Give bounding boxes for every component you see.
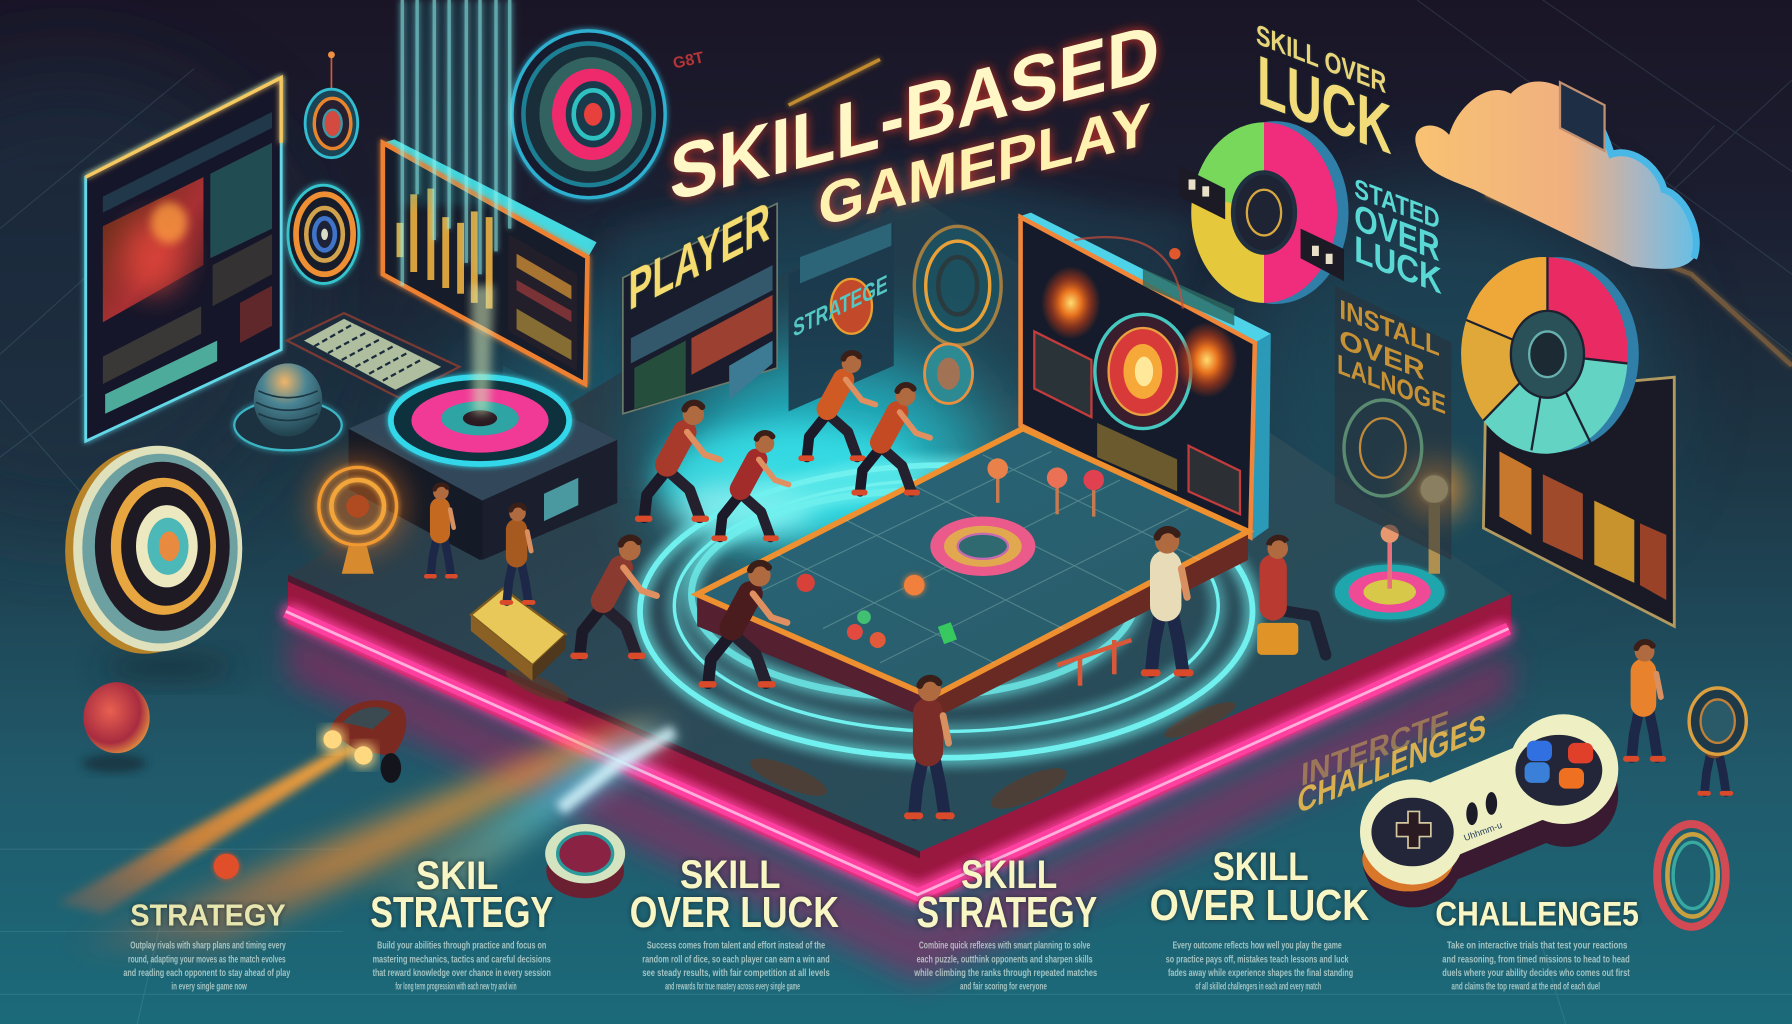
- players: [426, 353, 1663, 816]
- cyan floor glow: [657, 354, 989, 560]
- column: skill strategy: [370, 854, 553, 993]
- column: skill strategy two: while climbing the ranks through repeated matches: [914, 968, 1097, 979]
- central screen: [1017, 213, 1271, 539]
- orange install over lalnoge panel: LALNOGE: [1337, 348, 1446, 421]
- column: skill strategy two: STRATEGY: [917, 889, 1097, 937]
- column: strategy: in every single game now: [171, 982, 247, 993]
- left wall screen: [86, 78, 281, 441]
- small hanging target: [305, 51, 358, 158]
- ring puck: [545, 824, 625, 898]
- player 7 white shirt: [1144, 529, 1190, 673]
- segmented wheel two: [1461, 257, 1639, 454]
- decorative flare arc: [1074, 237, 1183, 309]
- column: skill over luck: and rewards for true mastery across every single game: [665, 982, 800, 993]
- medium target: [288, 185, 359, 283]
- strategy word: STRATEGE: [793, 269, 888, 342]
- bottom right ring: [1657, 824, 1726, 927]
- column: skill over luck two: fades away while experience shapes the final standing: [1168, 968, 1353, 979]
- title: GAMEPLAY: [818, 91, 1151, 239]
- column: skill strategy two: and fair scoring for everyone: [960, 982, 1047, 993]
- strategy panel: [789, 223, 894, 411]
- column: challenges: CHALLENGE5: [1435, 896, 1639, 934]
- column: challenges: duels where your ability decides who comes out first: [1442, 968, 1630, 979]
- column: skill strategy: for long term progression with each new try and win: [395, 982, 517, 993]
- column: skill over luck: random roll of dice, so each player can earn a win and: [642, 954, 830, 965]
- sphere on ring: [234, 363, 342, 450]
- column: skill over luck two: of all skilled challengers in each and every match: [1195, 982, 1321, 993]
- column: skill strategy two: [914, 853, 1097, 993]
- keyboard: [287, 313, 459, 398]
- speed streaks: [57, 720, 674, 949]
- game controller: [1360, 714, 1618, 907]
- skill over luck heading: SKILL OVER: [1256, 18, 1386, 100]
- column: skill strategy: that reward knowledge over chance in every session: [373, 968, 551, 979]
- gold crate: [471, 589, 566, 681]
- red ball: [82, 682, 150, 773]
- column: challenges: and reasoning, from timed missions to head to head: [1442, 954, 1630, 965]
- column: challenges: [1435, 896, 1639, 993]
- column: skill strategy: Build your abilities through practice and focus on: [377, 941, 546, 952]
- column: skill over luck two: SKILL: [1213, 845, 1309, 889]
- monitor: [383, 139, 597, 423]
- column: strategy: and reading each opponent to stay ahead of play: [123, 968, 290, 979]
- column: skill over luck: see steady results, with fair competition at all levels: [642, 968, 830, 979]
- game table: [697, 429, 1248, 720]
- neon rings: [640, 465, 1253, 758]
- player 1: [638, 403, 720, 519]
- cyan stated over luck: LUCK: [1354, 227, 1442, 303]
- column: challenges: and claims the top reward at the end of each duel: [1451, 982, 1600, 993]
- interactive challenges sign: CHALLENGES: [1297, 707, 1487, 822]
- column: skill strategy: STRATEGY: [370, 889, 553, 937]
- title: SKILL-BASED: [669, 8, 1159, 218]
- small red tag with flare: [672, 49, 880, 105]
- column: skill over luck: OVER LUCK: [630, 889, 839, 937]
- pedestal target: [349, 286, 617, 560]
- player 8 seated: [1257, 537, 1326, 655]
- player 9 front: [907, 678, 951, 816]
- column: skill strategy: mastering mechanics, tactics and careful decisions: [373, 954, 551, 965]
- column: skill over luck: [630, 853, 839, 993]
- right panel: [1483, 377, 1674, 626]
- neon vertical line: [1294, 343, 1296, 526]
- light beam: [400, 0, 514, 286]
- player 6: [702, 563, 787, 684]
- column: strategy: Outplay rivals with sharp plans and timing every: [130, 941, 286, 952]
- glowing lamp: [1405, 459, 1464, 574]
- column: skill strategy two: SKILL: [961, 853, 1057, 897]
- column: challenges: Take on interactive trials that test your reactions: [1447, 941, 1628, 952]
- column: skill strategy two: Combine quick reflexes with smart planning to solve: [919, 941, 1090, 952]
- column: strategy: round, adapting your moves as the match evolves: [128, 954, 286, 965]
- player heading: PLAYER: [629, 190, 770, 324]
- small red tag with flare: G8T: [672, 49, 706, 72]
- column: skill over luck two: Every outcome reflects how well you play the game: [1173, 941, 1342, 952]
- cyan stated over luck: [1354, 172, 1442, 303]
- column: strategy: STRATEGY: [130, 898, 286, 933]
- joystick target on platform: [1335, 525, 1445, 619]
- cloud: [1415, 81, 1792, 366]
- player 3: [801, 353, 875, 458]
- big left target: [65, 446, 242, 681]
- race car: [323, 700, 406, 783]
- skill over luck heading: LUCK: [1257, 41, 1392, 170]
- segmented wheel one: [1179, 121, 1349, 304]
- orange install over lalnoge panel: OVER: [1339, 323, 1425, 386]
- column: skill over luck: SKILL: [680, 853, 781, 897]
- skill over luck heading: [1256, 18, 1392, 170]
- column: skill strategy: SKIL: [416, 854, 498, 898]
- cyan stated over luck: OVER: [1354, 195, 1440, 270]
- column: skill over luck two: [1150, 845, 1369, 993]
- column: skill strategy two: each puzzle, outthink opponents and sharpen skills: [917, 954, 1093, 965]
- player info panel: [623, 190, 777, 414]
- column: skill over luck: Success comes from talent and effort instead of the: [647, 941, 825, 952]
- game controller: Uhhmm-u: [1462, 820, 1503, 843]
- floating teal target: [914, 226, 1001, 403]
- player 4: [854, 385, 930, 493]
- player 5: [573, 538, 657, 656]
- column: skill over luck two: OVER LUCK: [1150, 882, 1369, 930]
- column: skill over luck two: so practice pays off, mistakes teach lessons and luck: [1166, 954, 1349, 965]
- orange install over lalnoge panel: [1335, 286, 1451, 560]
- cyan stated over luck: STATED: [1354, 172, 1440, 236]
- back cover of platform: [617, 171, 1200, 480]
- platform: [286, 194, 1511, 983]
- player 2: [714, 433, 789, 538]
- column: strategy: [123, 898, 290, 993]
- orange glowing ring lamp: [310, 458, 406, 574]
- small bystanders on platform: [426, 484, 456, 576]
- orange install over lalnoge panel: INSTALL: [1339, 293, 1440, 362]
- large top target: [512, 31, 665, 198]
- small red ball: [214, 854, 239, 879]
- spectator with target: [1689, 688, 1746, 793]
- spectator orange shirt: [1626, 642, 1663, 759]
- interactive challenges sign: INTERCTE: [1300, 703, 1450, 794]
